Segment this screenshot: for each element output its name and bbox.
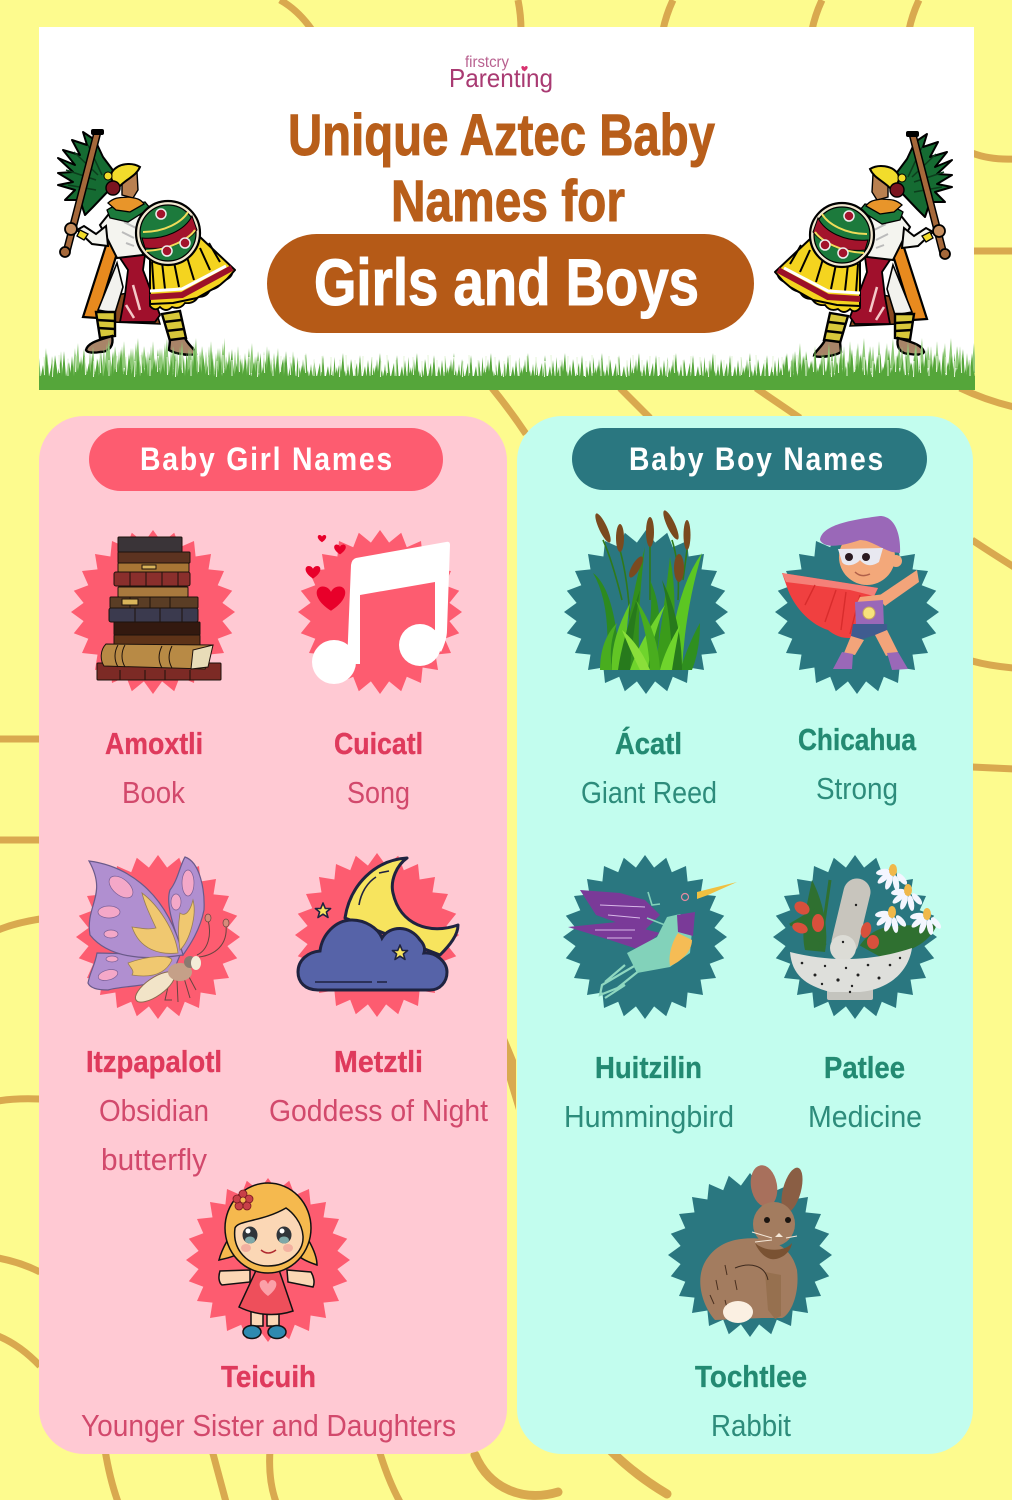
meaning: Hummingbird <box>564 1099 734 1134</box>
card: Teicuih <box>81 1178 456 1443</box>
icon: mortar, pestle and flowers <box>790 864 943 1000</box>
panel: baby boy names <box>517 416 973 1454</box>
name: Ácatl <box>615 726 682 761</box>
icon: giant reeds <box>593 509 702 670</box>
name: Itzpapalotl <box>86 1044 222 1079</box>
title line 1: Unique Aztec Baby <box>288 103 715 168</box>
icon: moon, cloud and stars <box>298 858 458 990</box>
meaning: Rabbit <box>711 1408 791 1443</box>
meaning line 2: butterfly <box>101 1142 207 1177</box>
meaning: Giant Reed <box>581 775 717 810</box>
card: Tochtlee <box>668 1163 832 1443</box>
card: Cuicatl <box>298 530 462 810</box>
name: Huitzilin <box>595 1050 702 1085</box>
logo: firstcry <box>465 54 509 71</box>
title pill: Girls and Boys <box>314 245 699 319</box>
meaning: Younger Sister and Daughters <box>81 1408 456 1443</box>
panel: baby girl names <box>39 416 507 1454</box>
meaning line 1: Obsidian <box>99 1093 209 1128</box>
meaning: Goddess of Night <box>269 1093 488 1128</box>
card: Chicahua <box>775 516 939 806</box>
logo: Parenting <box>449 63 553 93</box>
icon: boy superhero <box>782 516 919 670</box>
name: Tochtlee <box>695 1359 807 1394</box>
left warrior <box>58 129 235 355</box>
meaning: Medicine <box>808 1099 922 1134</box>
icon: hummingbird <box>568 882 737 998</box>
title pill <box>267 234 754 333</box>
name: Patlee <box>824 1050 905 1085</box>
name: Teicuih <box>221 1359 316 1394</box>
card: Huitzilin <box>563 855 737 1134</box>
meaning: Song <box>347 775 410 810</box>
card: Ácatl <box>564 509 728 810</box>
icon: stack of books <box>97 537 221 680</box>
icon: butterfly <box>88 857 229 1008</box>
girl heading pill: Baby Girl Names <box>140 441 394 477</box>
grass strip <box>39 338 975 390</box>
gap line between panels <box>507 1038 516 1110</box>
card: Itzpapalotl <box>76 855 240 1177</box>
name: Metztli <box>334 1044 423 1079</box>
boy heading pill: Baby Boy Names <box>629 441 885 477</box>
right warrior <box>775 131 952 357</box>
card: Amoxtli <box>71 530 235 810</box>
icon: music note and hearts <box>306 535 450 684</box>
icon: rabbit <box>700 1163 807 1323</box>
header panel <box>39 27 975 390</box>
icon: little girl <box>219 1183 317 1338</box>
meaning: Strong <box>816 771 898 806</box>
name: Amoxtli <box>105 726 203 761</box>
name: Cuicatl <box>334 726 423 761</box>
girl heading pill <box>89 428 443 491</box>
title line 2: Names for <box>391 169 625 234</box>
card: Metztli <box>269 853 488 1128</box>
name: Chicahua <box>798 722 917 757</box>
card: Patlee <box>773 855 943 1134</box>
boy heading pill <box>572 428 927 490</box>
meaning: Book <box>122 775 185 810</box>
